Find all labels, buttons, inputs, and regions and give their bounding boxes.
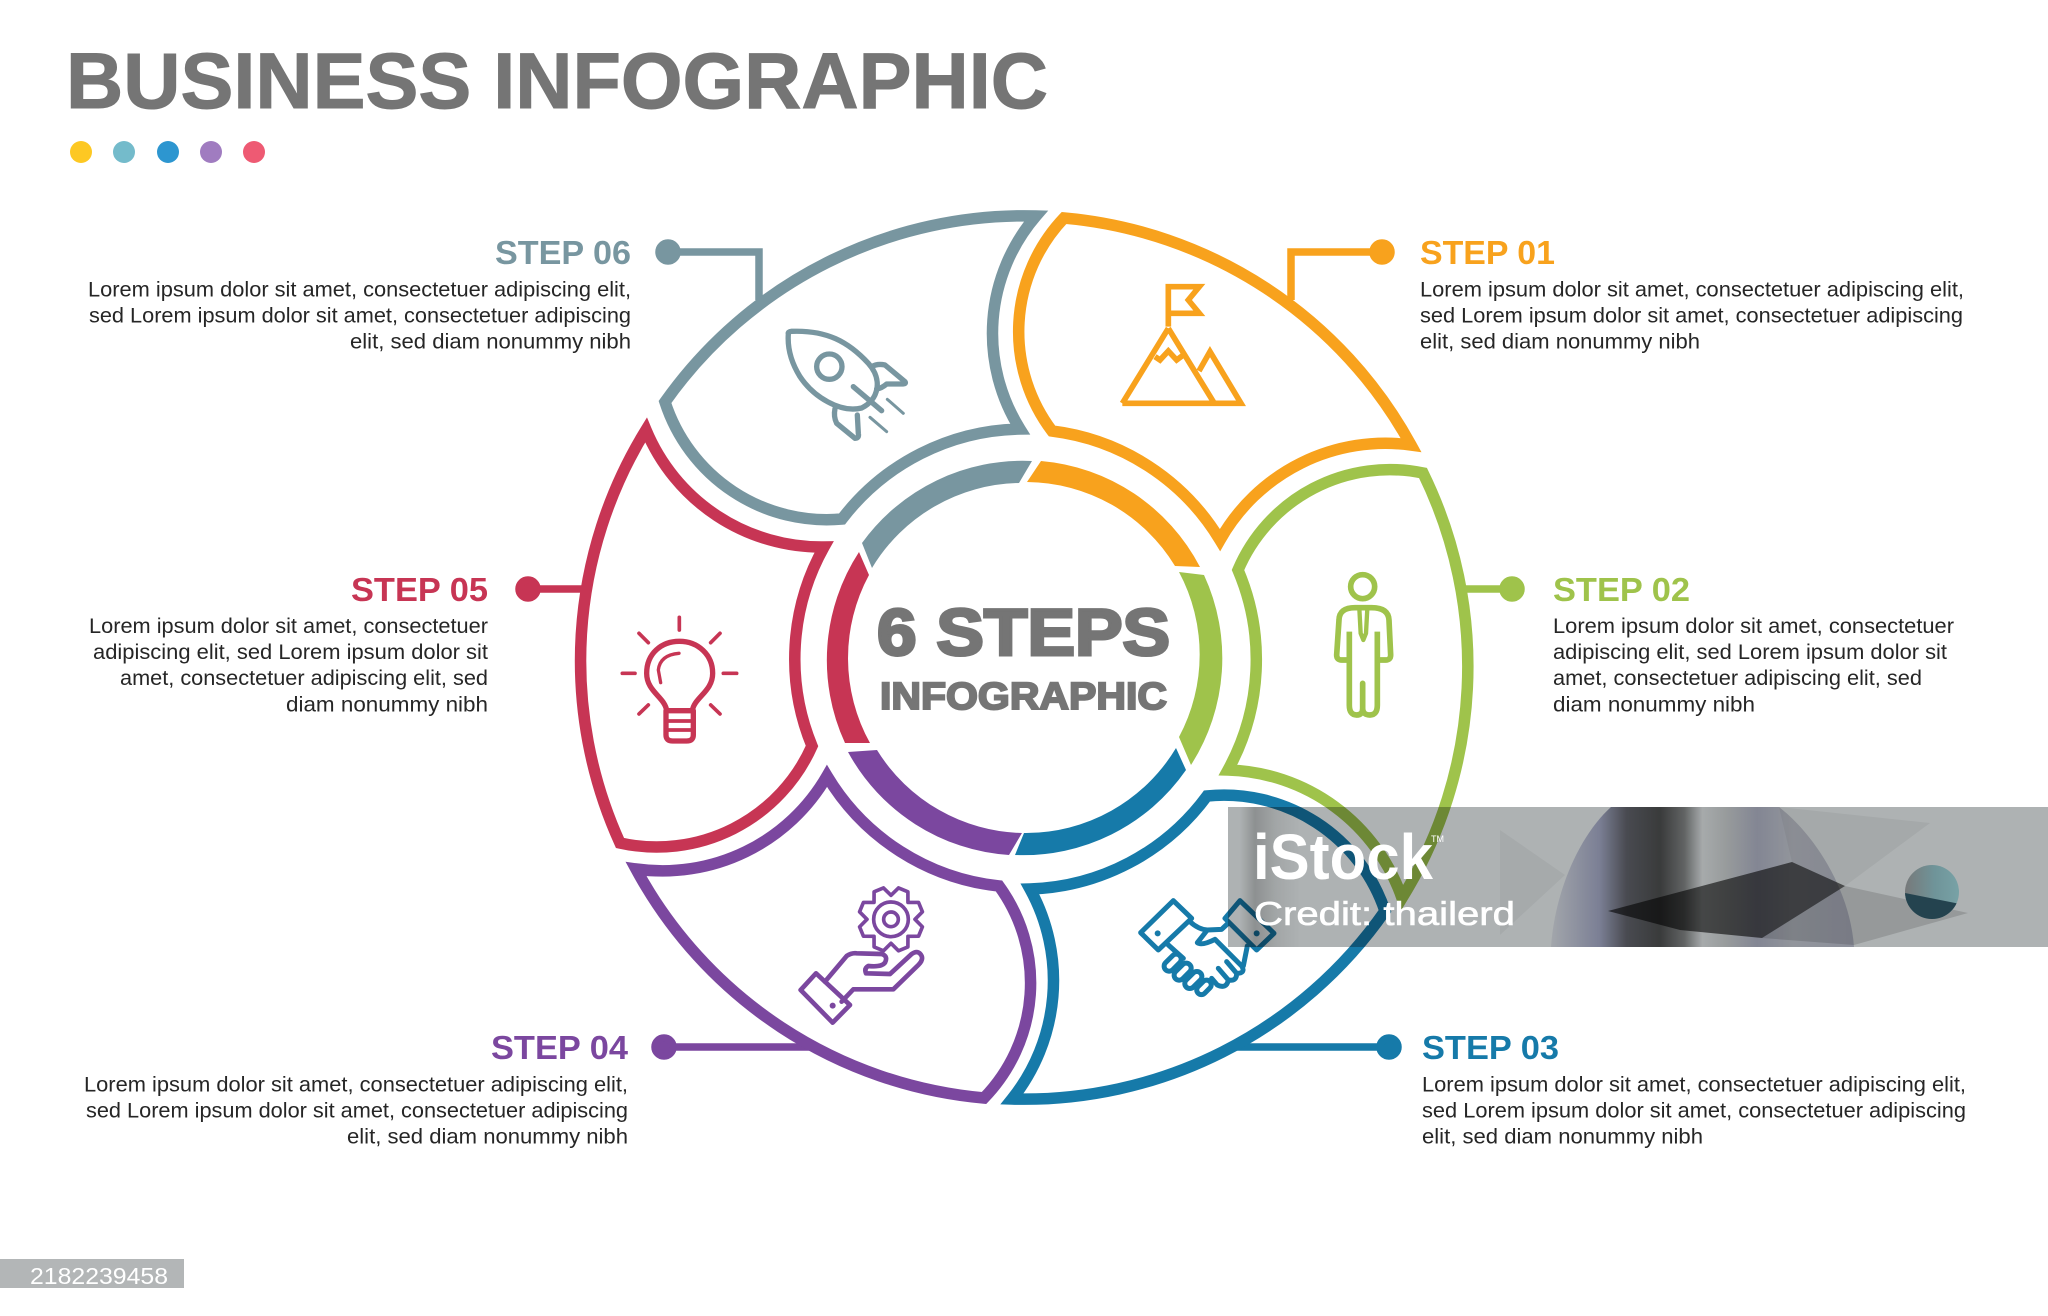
heading: step 03: STEP 03	[1422, 1029, 1559, 1066]
text block: step 02: adipiscing elit, sed Lorem ipsum dolor sit	[1553, 640, 1947, 664]
icon: mountain with flag	[1122, 287, 1241, 403]
panel: step 01 text	[1420, 234, 1964, 354]
panel: step 03 text	[1422, 1029, 1966, 1148]
icon: rocket	[788, 331, 905, 438]
connector: step 03	[1236, 1038, 1398, 1056]
heading: step 02: STEP 02	[1553, 571, 1690, 608]
text block: step 02: Lorem ipsum dolor sit amet, consectetuer	[1553, 614, 1954, 638]
text block: step 03: sed Lorem ipsum dolor sit amet, consectetuer adipiscing	[1422, 1098, 1966, 1122]
icon: hand holding gear	[801, 888, 922, 1023]
centre heading: INFOGRAPHIC	[880, 676, 1167, 718]
text block: step 04: elit, sed diam nonummy nibh	[347, 1124, 628, 1148]
heading: step 04: STEP 04	[491, 1029, 629, 1066]
heading: step 05: STEP 05	[351, 571, 488, 608]
heading: step 06: STEP 06	[495, 234, 631, 271]
petal: step 03	[1012, 795, 1385, 1099]
image id badge: 2182239458	[30, 1263, 168, 1289]
connector: step 05	[519, 580, 585, 598]
text block: step 05: Lorem ipsum dolor sit amet, consectetuer	[89, 614, 488, 638]
text block: step 01	[1420, 278, 1964, 354]
panel: step 04 text	[84, 1029, 629, 1148]
watermark logo: iStock	[1253, 821, 1433, 893]
connector: step 01	[1291, 243, 1391, 300]
text block: step 03: Lorem ipsum dolor sit amet, consectetuer adipiscing elit,	[1422, 1072, 1966, 1096]
connector: step 06	[659, 243, 759, 300]
text block: step 02	[1553, 614, 1954, 716]
text block: step 01: elit, sed diam nonummy nibh	[1420, 330, 1700, 354]
petal: step 04	[636, 776, 1031, 1098]
text block: step 04: sed Lorem ipsum dolor sit amet, consectetuer adipiscing	[86, 1098, 628, 1122]
text block: step 03	[1422, 1072, 1966, 1148]
text block: step 04	[84, 1072, 628, 1148]
text block: step 06: Lorem ipsum dolor sit amet, consectetuer adipiscing elit,	[88, 278, 631, 302]
text block: step 06: sed Lorem ipsum dolor sit amet, consectetuer adipiscing	[89, 304, 631, 328]
connector: step 02	[1462, 580, 1521, 598]
panel: step 05 text	[89, 571, 488, 716]
text block: step 05: diam nonummy nibh	[286, 692, 488, 716]
text block: step 02: amet, consectetuer adipiscing elit, sed	[1553, 666, 1922, 690]
image id badge	[0, 1259, 184, 1289]
text block: step 05: adipiscing elit, sed Lorem ipsum dolor sit	[93, 640, 488, 664]
petal: step 06	[665, 216, 1036, 520]
text block: step 02: diam nonummy nibh	[1553, 692, 1755, 716]
panel: step 02 text	[1553, 571, 1954, 716]
text block: step 06	[88, 278, 631, 354]
heading: step 01: STEP 01	[1420, 234, 1555, 271]
colour dots	[70, 141, 265, 163]
text block: step 06: elit, sed diam nonummy nibh	[350, 330, 631, 354]
petal: step 01	[1019, 218, 1411, 540]
petal: step 02	[1228, 470, 1468, 898]
text block: step 04: Lorem ipsum dolor sit amet, consectetuer adipiscing elit,	[84, 1072, 628, 1096]
text block: step 01: Lorem ipsum dolor sit amet, consectetuer adipiscing elit,	[1420, 278, 1964, 302]
connector: step 04	[655, 1038, 812, 1056]
text block: step 05	[89, 614, 488, 716]
text block: step 03: elit, sed diam nonummy nibh	[1422, 1124, 1703, 1148]
centre heading	[877, 595, 1170, 718]
panel: step 06 text	[88, 234, 631, 354]
centre ring	[827, 461, 1222, 855]
icon: businessman	[1337, 575, 1391, 715]
centre heading: 6 STEPS	[877, 595, 1170, 669]
icon: light bulb	[622, 617, 737, 741]
watermark sphere	[1905, 865, 1959, 919]
icon: handshake	[1141, 901, 1274, 997]
text block: step 01: sed Lorem ipsum dolor sit amet, consectetuer adipiscing	[1420, 304, 1963, 328]
title: BUSINESS INFOGRAPHIC	[66, 36, 1048, 125]
watermark band	[1228, 807, 2048, 947]
text block: step 05: amet, consectetuer adipiscing elit, sed	[120, 666, 488, 690]
watermark logo: TM	[1431, 834, 1444, 844]
petal: step 05	[581, 430, 824, 847]
watermark credit: Credit: thailerd	[1254, 895, 1515, 932]
